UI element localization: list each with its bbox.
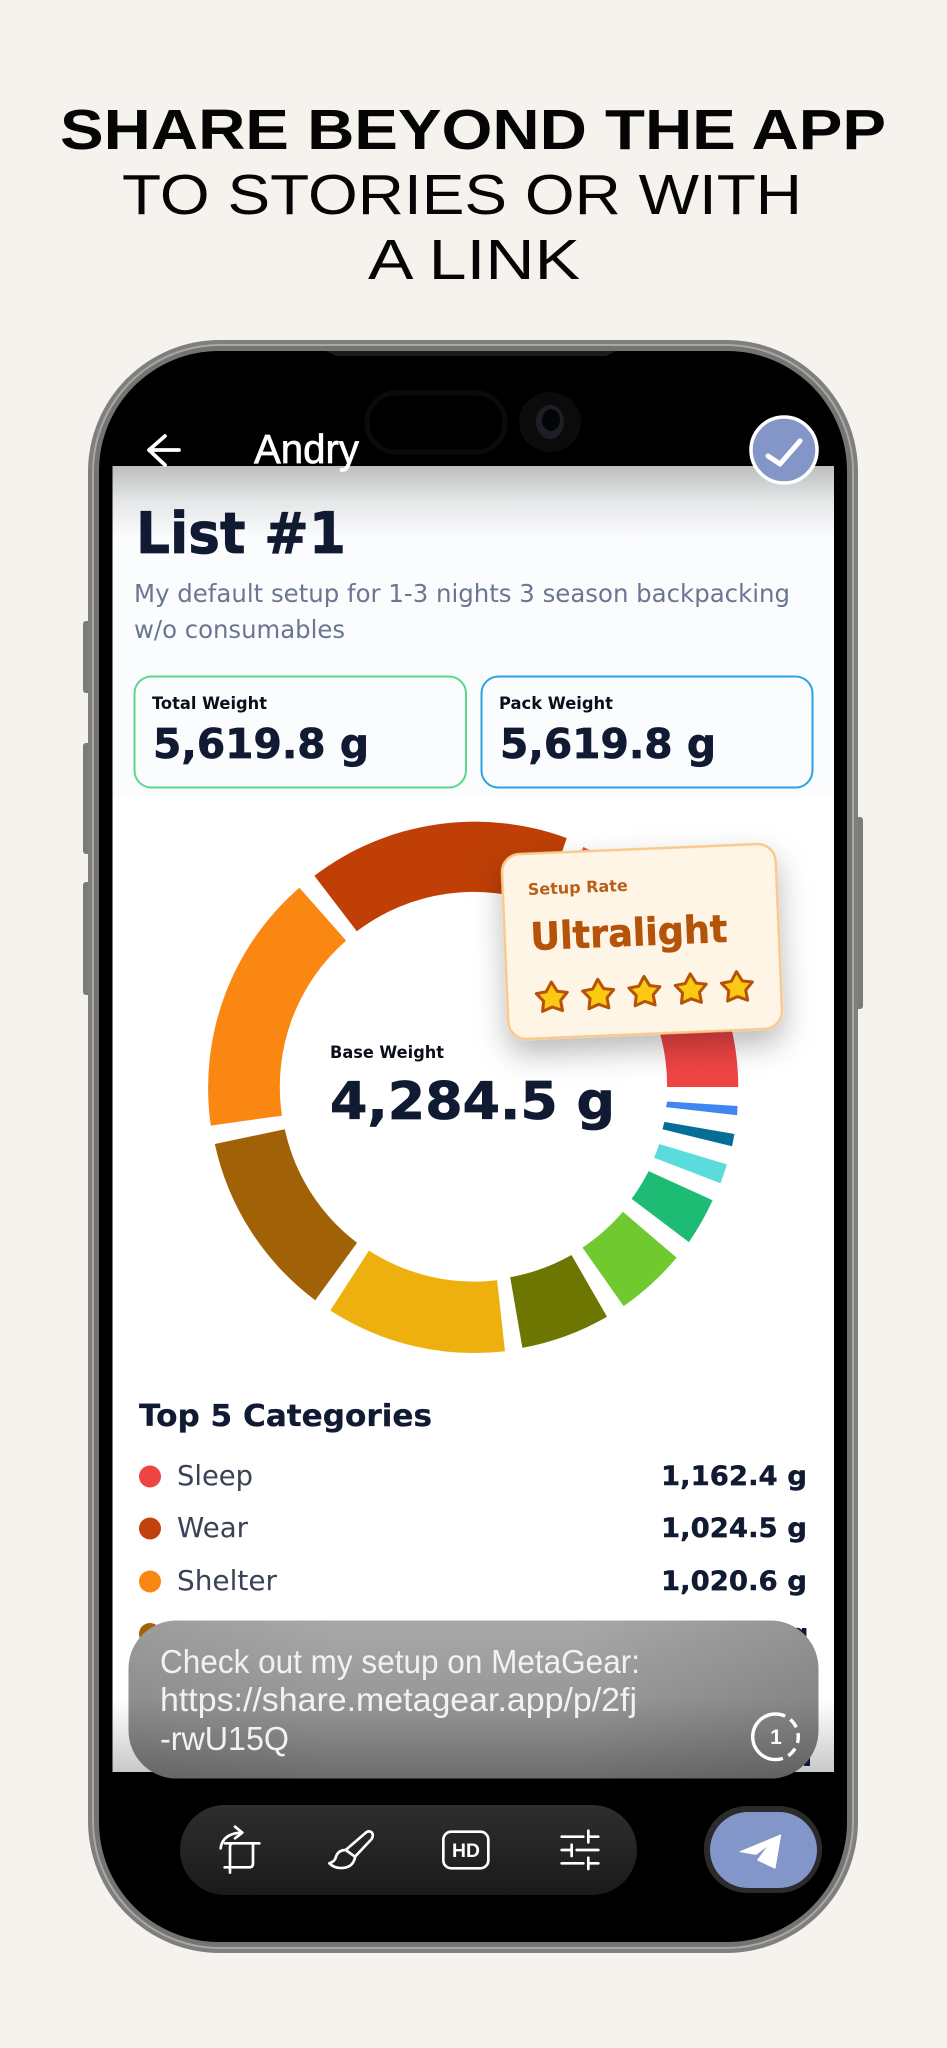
icon: view-once counter — [753, 1714, 798, 1760]
card: pack weight: Pack Weight — [499, 694, 613, 714]
contact name: Andry — [254, 426, 359, 472]
setup rate card — [501, 843, 783, 1040]
bottom toolbar pill — [180, 1805, 637, 1895]
list heading: w/o consumables — [134, 615, 345, 644]
list heading: List #1 — [136, 501, 346, 567]
title: A LINK — [368, 228, 580, 292]
caption bubble — [128, 1620, 818, 1778]
icon: check badge — [751, 417, 817, 483]
phone frame — [88, 340, 858, 1953]
donut centre label — [330, 1043, 615, 1132]
caption text: -rwU15Q — [160, 1720, 289, 1757]
list heading: My default setup for 1-3 nights 3 season backpacking — [134, 579, 790, 608]
card: pack weight: 5,619.8 g — [500, 720, 716, 768]
row: wear: Wear — [177, 1511, 248, 1544]
icon: HD badge — [443, 1832, 488, 1868]
icon: rating stars — [536, 971, 753, 1012]
title — [60, 98, 886, 292]
card: pack weight — [482, 676, 812, 788]
row: shelter: Shelter — [177, 1564, 277, 1597]
list heading — [134, 501, 790, 644]
top 5 categories list: Top 5 Categories — [139, 1399, 432, 1434]
card: total weight — [134, 676, 466, 788]
setup rate card: Ultralight — [530, 907, 728, 959]
side buttons — [83, 621, 863, 1009]
icon: brush — [329, 1831, 373, 1868]
icon: HD badge: HD — [452, 1841, 480, 1862]
row: wear — [139, 1511, 807, 1544]
row: fourth category, mostly hidden: g — [790, 1619, 809, 1649]
top 5 categories list — [139, 1399, 810, 1766]
icon: paper plane — [740, 1835, 781, 1868]
row: shelter: 1,020.6 g — [661, 1566, 807, 1597]
row: sleep: 1,162.4 g — [661, 1461, 807, 1492]
donut centre label: Base Weight — [330, 1043, 444, 1063]
caption text: https://share.metagear.app/p/2fj — [160, 1681, 637, 1718]
title: SHARE BEYOND THE APP — [60, 98, 886, 162]
icon: back arrow — [149, 436, 179, 465]
phone mockup — [83, 340, 863, 1953]
caption text: Check out my setup on MetaGear: — [160, 1643, 640, 1680]
row: sleep: Sleep — [177, 1459, 253, 1492]
donut centre label: 4,284.5 g — [330, 1072, 615, 1132]
donut chart — [208, 822, 738, 1353]
icon: crop rotate — [221, 1827, 259, 1873]
camera cutout — [367, 392, 581, 452]
screen — [112, 466, 834, 1772]
title: TO STORIES OR WITH — [122, 163, 802, 227]
top navigation bar — [149, 417, 817, 483]
icon: sliders — [562, 1831, 598, 1869]
setup rate card: Setup Rate — [527, 876, 628, 899]
card: total weight: Total Weight — [152, 694, 267, 714]
row: fourth category, mostly hidden — [139, 1619, 810, 1766]
row: shelter — [139, 1564, 807, 1597]
row: wear: 1,024.5 g — [661, 1513, 807, 1544]
card: total weight: 5,619.8 g — [153, 720, 369, 768]
row: sleep — [139, 1459, 807, 1492]
caption text — [160, 1643, 640, 1757]
icon: view-once counter: 1 — [770, 1726, 782, 1749]
send button — [704, 1806, 822, 1893]
